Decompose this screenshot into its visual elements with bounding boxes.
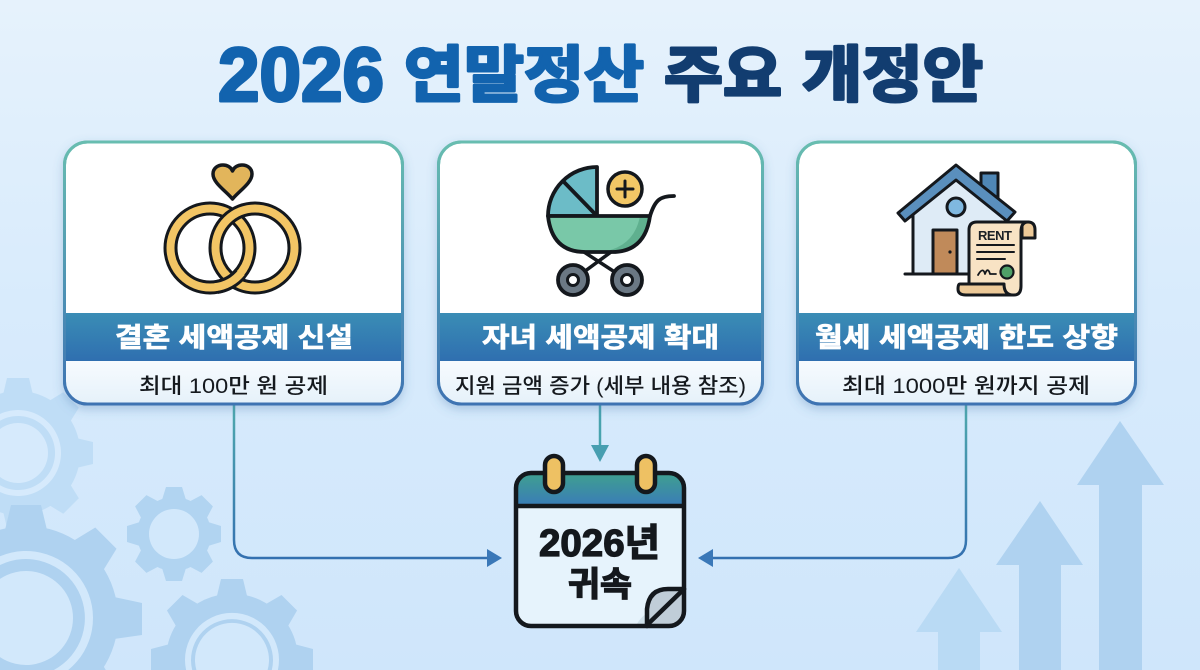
heading: child: 자녀 세액공제 확대 xyxy=(482,323,719,353)
title: 개정안 xyxy=(802,41,983,109)
icon: calendar with 2026 attribution xyxy=(516,456,684,626)
panel: monthly rent tax credit xyxy=(797,142,1136,405)
text: child detail: 지원 금액 증가 (세부 내용 참조) xyxy=(455,375,746,398)
icon: wedding rings with heart xyxy=(170,165,294,288)
background gear: top left xyxy=(0,378,93,528)
background arrow: medium xyxy=(996,501,1083,670)
icon: house with rent contract xyxy=(898,165,1035,295)
title xyxy=(218,33,983,118)
background arrow: tall xyxy=(1077,421,1164,670)
panel: child tax credit xyxy=(438,142,763,405)
background gear: large bottom left xyxy=(0,505,142,670)
title: 주요 xyxy=(664,41,782,109)
panel: marriage tax credit xyxy=(64,142,403,405)
icon: baby stroller with plus xyxy=(548,167,674,295)
title: 연말정산 xyxy=(404,41,644,109)
connector: right card to calendar xyxy=(698,405,966,567)
icon text: RENT: RENT xyxy=(978,228,1012,243)
background gear: small centre xyxy=(127,487,221,581)
text: marriage detail: 최대 100만 원 공제 xyxy=(139,375,328,398)
text: year: 2026년 xyxy=(539,523,660,565)
heading: rent: 월세 세액공제 한도 상향 xyxy=(815,323,1118,353)
text: attribution: 귀속 xyxy=(568,566,632,604)
background arrow: short xyxy=(916,568,1002,670)
connector: centre card to calendar xyxy=(591,405,609,462)
title: 2026 xyxy=(218,33,384,118)
background gear: bottom centre xyxy=(151,579,313,670)
connector: left card to calendar xyxy=(234,405,502,567)
heading: marriage: 결혼 세액공제 신설 xyxy=(115,323,353,353)
text: rent detail: 최대 1000만 원까지 공제 xyxy=(842,375,1090,398)
